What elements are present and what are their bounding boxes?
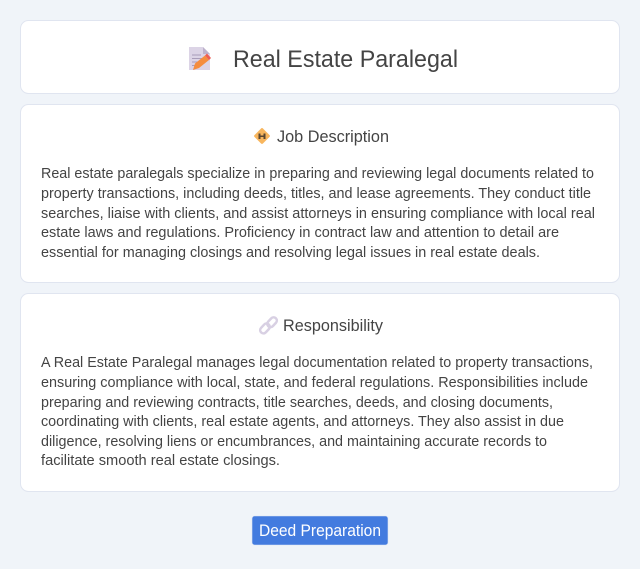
heading: responsibility: Responsibility <box>283 317 384 335</box>
text block: job description: estate laws and regulations. Proficiency in contract law and attention to detail are <box>41 224 559 241</box>
text block: job description: Real estate paralegals specialize in preparing and reviewing legal documents related to <box>41 165 594 182</box>
panel: responsibility <box>20 294 620 492</box>
title: Real Estate Paralegal <box>233 46 458 73</box>
text block: responsibility: facilitate smooth real estate closings. <box>41 452 280 469</box>
panel: title card <box>20 20 620 94</box>
heading: job description: Job Description <box>277 128 389 146</box>
panel: job description <box>20 104 620 282</box>
text block: responsibility: diligence, resolving liens or encumbrances, and maintaining accurate records to <box>41 433 547 450</box>
text block: job description: searches, liaise with clients, and assist attorneys in ensuring compliance with local real <box>41 205 595 222</box>
icon: document with pencil <box>189 47 211 70</box>
text block: responsibility: preparing and reviewing contracts, title searches, deeds, and closing documents, <box>41 394 553 411</box>
text block: responsibility: ensuring compliance with local, state, and federal regulations. Responsibilities include <box>41 374 588 391</box>
button: deed preparation: Deed Preparation <box>259 522 381 540</box>
text block: responsibility: coordinating with clients, real estate agents, and attorneys. They also assist in due <box>41 413 564 430</box>
text block: job description: property transactions, including deeds, titles, and lease agreements. They conduct title <box>41 185 591 202</box>
text block: responsibility: A Real Estate Paralegal manages legal documentation related to property transactions, <box>41 354 593 371</box>
text block: job description: essential for managing closings and resolving legal issues in real estate deals. <box>41 244 540 261</box>
button: deed preparation <box>252 516 388 545</box>
text block: responsibility <box>41 354 593 469</box>
text block: job description <box>41 165 595 261</box>
icon: warning diamond <box>254 128 270 144</box>
icon: chain link <box>259 316 278 335</box>
